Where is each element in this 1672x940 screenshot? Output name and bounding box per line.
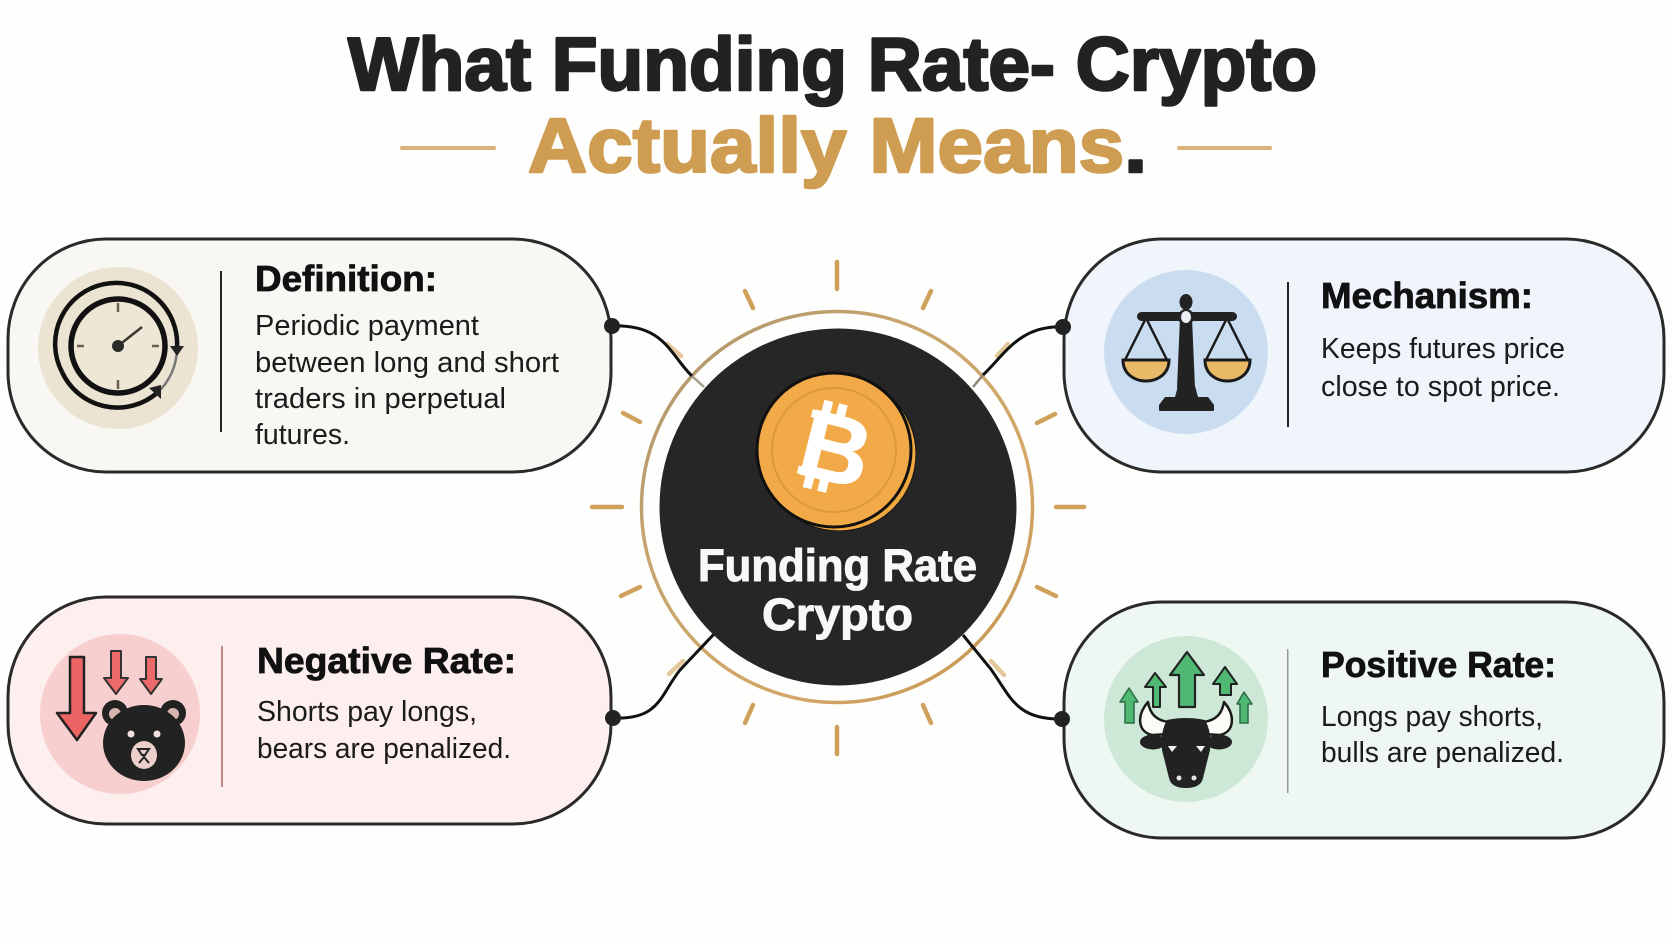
connector: negative rate xyxy=(605,633,715,726)
icon: bull with up arrows xyxy=(1104,636,1268,802)
hub label: Crypto xyxy=(762,589,913,640)
body text: positive rate: Longs pay shorts, xyxy=(1321,701,1543,733)
panel: mechanism xyxy=(1064,239,1664,472)
body text: mechanism: Keeps futures price xyxy=(1321,333,1565,365)
body text: positive rate: bulls are penalized. xyxy=(1321,737,1564,769)
body text: definition: Periodic payment xyxy=(255,310,479,342)
panel: positive rate xyxy=(1064,602,1664,838)
icon: bitcoin coin xyxy=(757,373,916,531)
body text: positive rate xyxy=(1321,701,1564,769)
icon: balance scale xyxy=(1104,270,1268,434)
body text: mechanism: close to spot price. xyxy=(1321,371,1560,403)
divider xyxy=(220,271,222,432)
panel: definition xyxy=(8,239,611,472)
icon: bear with down arrows xyxy=(40,634,200,794)
heading: positive rate: Positive Rate: xyxy=(1321,644,1556,685)
title accent line right xyxy=(1177,146,1272,150)
body text: definition: between long and short xyxy=(255,347,559,379)
divider xyxy=(1287,282,1289,427)
sunburst rays xyxy=(592,262,1084,754)
icon: clock with cycle arrows xyxy=(38,267,198,429)
body text: negative rate xyxy=(257,696,511,765)
body text: definition: futures. xyxy=(255,419,350,451)
heading: definition: Definition: xyxy=(255,258,437,299)
body text: definition: traders in perpetual xyxy=(255,383,506,415)
connector: positive rate xyxy=(963,635,1070,727)
bitcoin symbol: B xyxy=(789,389,882,510)
hub label xyxy=(698,540,977,640)
central hub xyxy=(660,328,1016,686)
hub label: Funding Rate xyxy=(698,540,977,591)
heading: mechanism: Mechanism: xyxy=(1321,275,1533,316)
panel: negative rate xyxy=(8,597,611,824)
gold ring xyxy=(642,312,1032,702)
title line 2: Actually Means . xyxy=(528,103,1147,189)
divider xyxy=(1287,649,1288,793)
connector: definition xyxy=(604,318,704,387)
body text: mechanism xyxy=(1321,333,1565,403)
body text: negative rate: Shorts pay longs, xyxy=(257,696,477,728)
title xyxy=(348,22,1317,189)
connector: mechanism xyxy=(973,319,1071,387)
title accent line left xyxy=(400,146,496,150)
body text: definition xyxy=(255,310,559,451)
body text: negative rate: bears are penalized. xyxy=(257,733,511,765)
heading: negative rate: Negative Rate: xyxy=(257,640,516,681)
title line 1: What Funding Rate- Crypto xyxy=(348,22,1317,106)
divider xyxy=(221,646,223,787)
